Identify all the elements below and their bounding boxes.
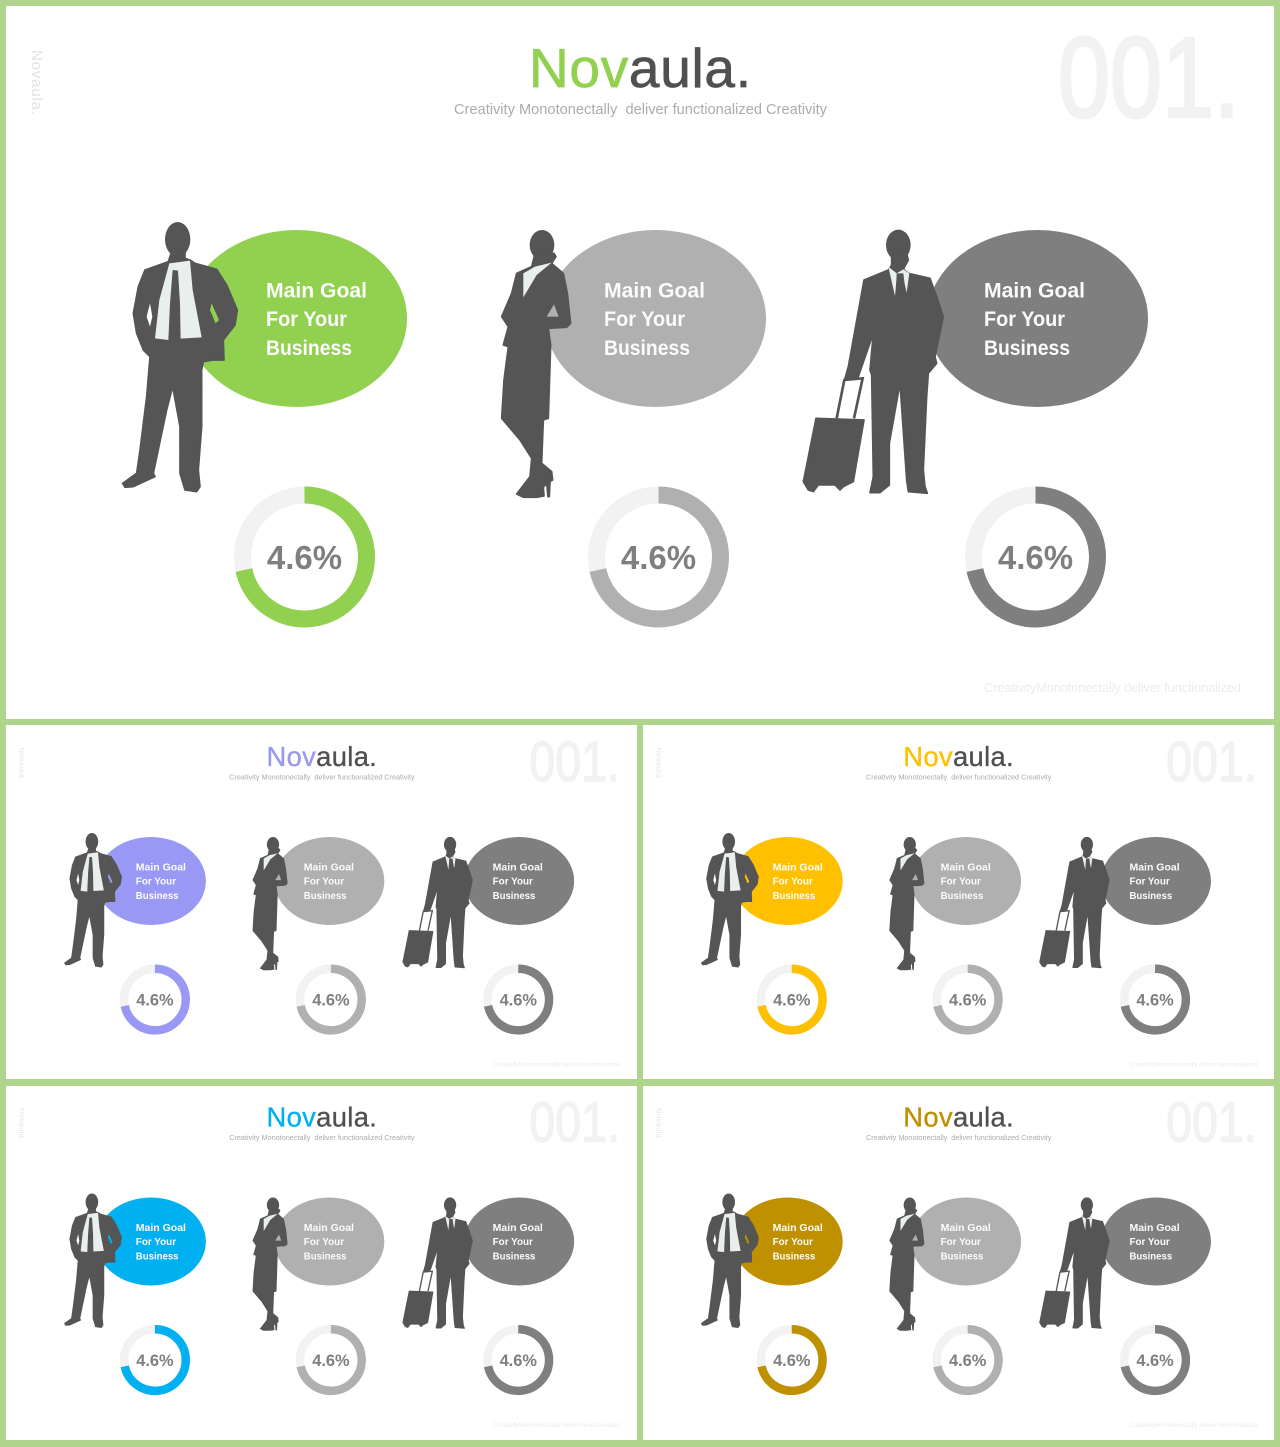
goal text 3: For Your — [1129, 1237, 1170, 1248]
donut chart 1: 4.6% — [773, 1352, 811, 1370]
icon: traveller silhouette with suitcase — [1040, 837, 1109, 968]
vertical brand label: Novaula. — [654, 748, 663, 780]
goal text 3: Main Goal — [1129, 1223, 1180, 1234]
goal bubble 2 — [911, 1198, 1021, 1285]
goal text 3: Main Goal — [984, 280, 1085, 302]
goal text 2: Main Goal — [941, 863, 991, 874]
footer note: CreativityMonotonectally deliver functionalized — [493, 1422, 621, 1429]
goal text 2: Business — [941, 891, 984, 902]
donut chart 1 — [124, 1329, 186, 1391]
donut chart 2: 4.6% — [312, 991, 350, 1009]
icon: businessman silhouette — [123, 222, 237, 492]
goal text 2: Main Goal — [604, 280, 705, 302]
donut chart 1 — [242, 495, 366, 619]
donut chart 1: 4.6% — [773, 991, 811, 1009]
goal bubble 1 — [186, 230, 407, 407]
goal text 1 — [136, 863, 186, 902]
goal text 1: For Your — [136, 1237, 176, 1248]
icon: businesswoman silhouette — [253, 1198, 287, 1330]
goal bubble 2 — [274, 1198, 384, 1285]
goal text 1: For Your — [773, 877, 813, 888]
goal text 2: For Your — [304, 1237, 344, 1248]
goal text 2: For Your — [604, 308, 685, 331]
donut chart 1 — [124, 969, 186, 1030]
vertical brand label: Novaula. — [28, 50, 45, 115]
goal text 2: Business — [304, 1252, 347, 1263]
panel: purple slide — [6, 725, 637, 1079]
title: Novaula. — [267, 741, 377, 772]
goal text 1: Business — [136, 891, 179, 902]
icon: businessman silhouette — [701, 1194, 758, 1328]
goal text 3: Main Goal — [493, 1223, 543, 1234]
goal text 1: For Your — [773, 1237, 813, 1248]
goal text 2 — [941, 1223, 991, 1263]
goal text 1 — [266, 280, 367, 360]
slide number: 001. — [529, 1091, 620, 1154]
goal text 2: For Your — [941, 1237, 981, 1248]
goal text 1: Business — [773, 891, 816, 902]
subtitle: Creativity Monotonectally deliver functionalized Creativity — [866, 1133, 1052, 1142]
goal text 3: For Your — [984, 308, 1065, 331]
subtitle: Creativity Monotonectally deliver functionalized Creativity — [229, 1133, 415, 1142]
goal text 2 — [304, 1223, 354, 1263]
footer note: CreativityMonotonectally deliver functionalized — [984, 680, 1241, 695]
goal text 3: For Your — [1129, 877, 1170, 888]
donut chart 2: 4.6% — [949, 1352, 987, 1370]
donut chart 2 — [596, 495, 720, 619]
goal text 1: Main Goal — [136, 1223, 186, 1234]
goal text 2: Business — [941, 1252, 984, 1263]
icon: businesswoman silhouette — [890, 1198, 924, 1330]
vertical brand label: Novaula. — [654, 1108, 663, 1140]
subtitle: Creativity Monotonectally deliver functionalized Creativity — [229, 772, 415, 781]
goal text 1: Business — [773, 1252, 816, 1263]
panel: gold slide — [643, 1086, 1274, 1440]
donut chart 2: 4.6% — [949, 991, 987, 1009]
donut chart 1 — [761, 1329, 823, 1391]
goal text 1: Business — [266, 337, 352, 360]
panel: yellow slide — [643, 725, 1274, 1079]
goal bubble 1 — [733, 1198, 843, 1285]
footer note: CreativityMonotonectally deliver functionalized — [1129, 1062, 1258, 1069]
donut chart 3 — [487, 1329, 549, 1391]
slide number: 001. — [1166, 1091, 1257, 1154]
goal text 1 — [136, 1223, 186, 1263]
donut chart 1: 4.6% — [136, 991, 174, 1009]
donut chart 1 — [761, 969, 823, 1030]
goal text 1: For Your — [136, 877, 176, 888]
slide number: 001. — [1058, 15, 1240, 142]
title: Novaula. — [529, 37, 751, 99]
icon: businesswoman silhouette — [502, 230, 571, 497]
goal text 1: Main Goal — [773, 1223, 823, 1234]
goal bubble 2 — [274, 837, 384, 925]
goal text 3: Business — [493, 891, 536, 902]
donut chart 2: 4.6% — [621, 539, 696, 576]
donut chart 1: 4.6% — [267, 539, 342, 576]
slide number: 001. — [529, 731, 620, 794]
goal bubble 3 — [927, 230, 1148, 407]
vertical brand label: Novaula. — [18, 1108, 27, 1140]
goal text 3 — [984, 280, 1085, 360]
goal text 3 — [493, 863, 543, 902]
donut chart 3 — [487, 969, 549, 1030]
goal bubble 3 — [464, 837, 574, 925]
goal text 1: For Your — [266, 308, 347, 331]
icon: businesswoman silhouette — [253, 837, 287, 970]
subtitle: Creativity Monotonectally deliver functionalized Creativity — [866, 772, 1052, 781]
goal bubble 3 — [464, 1198, 574, 1285]
goal text 2: Main Goal — [304, 863, 354, 874]
goal text 1: Main Goal — [773, 863, 823, 874]
footer note: CreativityMonotonectally deliver functionalized — [1129, 1422, 1258, 1429]
goal bubble 1 — [96, 837, 206, 925]
goal text 2 — [304, 863, 354, 902]
goal text 3: For Your — [493, 1237, 533, 1248]
goal bubble 3 — [1101, 1198, 1211, 1285]
goal text 3 — [1129, 1223, 1180, 1263]
goal text 3: Business — [1129, 1252, 1172, 1263]
goal text 3: Main Goal — [493, 863, 543, 874]
vertical brand label: Novaula. — [18, 748, 27, 780]
goal text 2 — [604, 280, 705, 360]
goal text 3: Main Goal — [1129, 863, 1180, 874]
goal bubble 2 — [911, 837, 1021, 925]
goal text 3: Business — [493, 1252, 536, 1263]
icon: businesswoman silhouette — [890, 837, 924, 970]
donut chart 3: 4.6% — [1136, 991, 1174, 1009]
goal text 3 — [1129, 863, 1180, 902]
donut chart 1: 4.6% — [136, 1352, 174, 1370]
donut chart 3: 4.6% — [500, 991, 537, 1009]
donut chart 2 — [300, 1329, 362, 1391]
donut chart 2 — [937, 1329, 998, 1391]
goal text 2: Business — [604, 337, 690, 360]
donut chart 3 — [974, 495, 1098, 619]
subtitle: Creativity Monotonectally deliver functionalized Creativity — [454, 102, 828, 118]
title: Novaula. — [903, 741, 1014, 772]
panel: main green slide — [6, 6, 1274, 719]
icon: businessman silhouette — [65, 833, 122, 967]
goal text 1 — [773, 1223, 823, 1263]
goal text 1: Business — [136, 1252, 179, 1263]
donut chart 2 — [937, 969, 998, 1030]
goal bubble 3 — [1101, 837, 1211, 925]
goal text 3: Business — [1129, 891, 1172, 902]
donut chart 2: 4.6% — [312, 1352, 350, 1370]
donut chart 2 — [300, 969, 362, 1030]
goal text 2: Main Goal — [941, 1223, 991, 1234]
panel: blue slide — [6, 1086, 637, 1440]
goal text 2: For Your — [304, 877, 344, 888]
goal text 1: Main Goal — [136, 863, 186, 874]
donut chart 3: 4.6% — [1136, 1352, 1174, 1370]
goal text 3: For Your — [493, 877, 533, 888]
goal text 2: Business — [304, 891, 347, 902]
slide number: 001. — [1166, 731, 1257, 794]
donut chart 3: 4.6% — [500, 1352, 537, 1370]
goal text 2 — [941, 863, 991, 902]
goal bubble 1 — [733, 837, 843, 925]
donut chart 3: 4.6% — [998, 539, 1073, 576]
donut chart 3 — [1124, 1329, 1186, 1391]
goal bubble 2 — [545, 230, 766, 407]
icon: businessman silhouette — [701, 833, 758, 967]
icon: traveller silhouette with suitcase — [1040, 1197, 1109, 1328]
goal text 1: Main Goal — [266, 280, 367, 302]
icon: traveller silhouette with suitcase — [803, 230, 943, 493]
title: Novaula. — [903, 1101, 1014, 1132]
goal text 3 — [493, 1223, 543, 1263]
icon: businessman silhouette — [65, 1194, 122, 1328]
goal bubble 1 — [96, 1198, 206, 1285]
goal text 1 — [773, 863, 823, 902]
icon: traveller silhouette with suitcase — [403, 1197, 472, 1328]
goal text 2: Main Goal — [304, 1223, 354, 1234]
goal text 2: For Your — [941, 877, 981, 888]
donut chart 3 — [1124, 969, 1186, 1030]
title: Novaula. — [267, 1101, 377, 1132]
footer note: CreativityMonotonectally deliver functionalized — [493, 1062, 621, 1069]
icon: traveller silhouette with suitcase — [403, 837, 472, 968]
goal text 3: Business — [984, 337, 1070, 360]
